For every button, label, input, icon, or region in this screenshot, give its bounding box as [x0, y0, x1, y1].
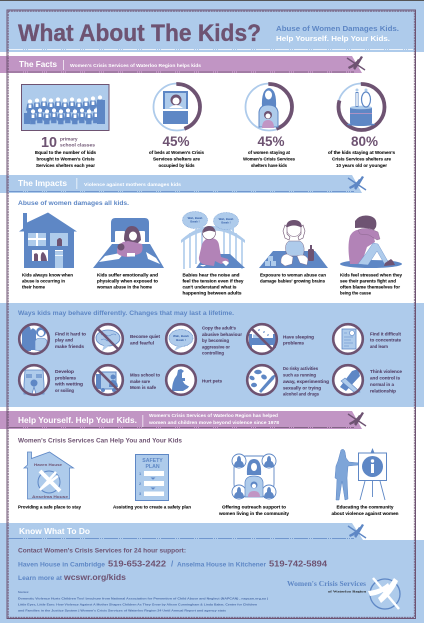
label: find it difficult: and learn: [370, 344, 388, 349]
text: kids suffer: Kids suffer emotionally and: [97, 272, 158, 278]
label: copy the adult's: [202, 326, 242, 356]
label: become quiet: [130, 334, 160, 346]
subtitle: Help Yourself. Help Your Kids.: [276, 34, 390, 43]
stat: 10 primary school classes: primary: [60, 136, 78, 142]
heading: know what to do: Know What To Do: [19, 527, 90, 536]
caption: safety plan: Assisting you to create a safety plan: [113, 505, 191, 510]
label: develop problems: Develop: [55, 369, 74, 374]
label: find it hard: [55, 331, 86, 349]
panel: the facts heading ribbon: [0, 56, 365, 73]
icon: sleeping problems: [247, 324, 277, 354]
icon: baby in crib: Bwah !: [221, 220, 231, 224]
panel: know what to do: [0, 523, 424, 623]
panel: the impacts heading ribbon: Violence against mothers damages kids: [84, 182, 181, 187]
icon: wetting or soiling: [19, 365, 49, 395]
panel: ways kids may behave differently: [0, 303, 424, 407]
icon: dragonfly: [348, 524, 366, 538]
title: What About The Kids?: [18, 20, 261, 47]
phone numbers: [18, 558, 327, 568]
text: 80% of kids: of the kids staying at Women's: [328, 150, 395, 155]
logo: women's crisis services: Women's Crisis Services: [287, 581, 366, 588]
icon: baby in crib: Bwah !: [190, 220, 200, 224]
stat: 10 primary school classes: school classes: [60, 142, 95, 148]
text: 45% of women: shelters have kids: [251, 163, 287, 168]
caption: outreach: women living in the community: [218, 511, 289, 516]
caption: educating: [332, 505, 399, 516]
label: hurt pets: Hurt pets: [202, 378, 222, 383]
text: kids feel stressed: see their parents fight and: [340, 278, 396, 284]
sources: [18, 590, 268, 612]
text: 80% of kids: Crisis Services shelters are: [332, 156, 391, 162]
text: babies hear: happening between adults: [182, 290, 242, 296]
icon: copy abusive behaviour: [166, 324, 196, 354]
text: 45% of women: Women's Crisis Services: [243, 156, 295, 162]
icon: find it hard to play: [19, 324, 49, 354]
label: develop problems: with wetting: [54, 382, 83, 387]
text: 45% of beds: occupied by kids: [158, 163, 195, 168]
phone numbers: Haven House in Cambridge: [18, 562, 105, 568]
label: do risky activities: Do risky activities: [283, 366, 318, 371]
label: miss school: make sure: [130, 379, 150, 384]
text: exposure: damage babies' growing brains: [260, 278, 325, 284]
text: kids feel stressed: being the cause: [340, 290, 371, 296]
text: exposure: [260, 272, 326, 284]
icon: haven house shelter: Anselma House: [32, 494, 69, 499]
panel: the impacts heading ribbon: [0, 175, 366, 193]
icon: miss school: [93, 365, 123, 395]
text: kids always know: [22, 272, 73, 290]
panel: help yourself heading ribbon: Women's Crisis Services of Waterloo Region has helped: [149, 413, 278, 418]
text: kids always know: Kids always know when: [22, 272, 73, 278]
text: kids feel stressed: Kids feel stressed when they: [340, 272, 402, 278]
label: think violence: Think violence: [370, 369, 402, 374]
icon: baby in crib: Wah, Bwah: [219, 217, 234, 221]
text: babies hear: feel the tension even if they: [182, 278, 244, 284]
icon: safety plan: SAFETY: [142, 458, 163, 464]
phone numbers: 519-742-5894: [269, 558, 327, 568]
text: 45% of beds: 45%: [162, 134, 190, 149]
heading: abuse damages all kids: Abuse of women damages all kids.: [18, 200, 129, 207]
icon: copy abusive behaviour: Bwah !: [176, 338, 186, 342]
icon: safety plan: [136, 454, 168, 500]
icon: safety plan: 3: [139, 491, 142, 496]
caption: educating: Educating the community: [336, 505, 394, 510]
panel: help yourself heading ribbon: women and children move beyond violence since 1978: [148, 420, 279, 425]
caption: safe place: Providing a safe place to stay: [18, 505, 81, 510]
caption: educating: about violence against women: [332, 511, 399, 516]
text: babies hear: [182, 272, 244, 296]
icon: safety plan: 1: [139, 471, 142, 476]
label: copy the adult's: Copy the adult's: [202, 326, 236, 330]
label: miss school: Miss school to: [130, 373, 160, 378]
label: find it hard: make friends: [55, 344, 84, 349]
text: 45% of beds: of beds at Women's Crisis: [149, 150, 204, 155]
contact heading: Contact Women's Crisis Services for 24 hour support:: [18, 548, 186, 554]
text: 45% of beds: [149, 134, 204, 168]
icon: difficulty concentrating: [333, 324, 363, 354]
text: 45% of women: of women staying at: [248, 150, 290, 155]
caption: outreach: Offering outreach support to: [222, 505, 286, 510]
subtitle: [276, 24, 399, 43]
phone numbers: /: [171, 560, 174, 568]
text: kids suffer: [96, 272, 158, 290]
icon: haven house shelter: Haven House: [34, 462, 63, 467]
text: 80% of kids: [328, 134, 395, 168]
stat: 10 primary school classes: brought to Women's Crisis: [36, 156, 95, 162]
logo: women's crisis services: of Waterloo Region: [328, 590, 366, 594]
text: 80% of kids: 80%: [351, 134, 378, 149]
chart: 45% of beds: [154, 84, 200, 130]
website: [18, 572, 126, 582]
stat: 10 primary school classes: Equal to the number of kids: [35, 150, 96, 155]
label: do risky activities: [283, 366, 329, 397]
label: develop problems: problems: [55, 375, 76, 380]
label: develop problems: or soiling: [55, 388, 74, 393]
text: kids suffer: physically when exposed to: [97, 278, 158, 284]
heading: crisis services can help: Women's Crisis Services Can Help You and Your Kids: [18, 438, 182, 445]
phone numbers: Anselma House in Kitchener: [177, 562, 266, 568]
panel: help yourself heading ribbon: Help Yourself. Help Your Kids.: [18, 415, 137, 425]
icon: presenter with info board: [335, 448, 386, 500]
label: become quiet: and fearful: [130, 340, 154, 346]
label: sleeping problems: problems: [283, 340, 304, 346]
sources: Domestic Violence Hurts Children Too! brochure from National Association for Prevention of Child Abuse and Neglect (NAPCAN) , napcan.org.au |: [18, 596, 268, 600]
chart: 45% of women: [246, 84, 292, 130]
text: kids always know: abuse is occurring in: [22, 278, 65, 284]
text: kids feel stressed: [340, 272, 402, 296]
stat: 10 primary school classes: 10: [41, 135, 57, 151]
icon: outreach support: [232, 454, 276, 499]
text: 45% of women: 45%: [257, 134, 285, 149]
label: miss school: Mom is safe: [130, 385, 156, 390]
label: think violence: relationship: [370, 389, 396, 394]
label: copy the adult's: aggressive or: [202, 344, 230, 349]
text: kids suffer: woman abuse in the home: [96, 284, 152, 290]
icon: risky activities: [247, 365, 277, 395]
label: become quiet: Become quiet: [130, 334, 160, 339]
label: do risky activities: such as running: [283, 373, 316, 378]
icon: sleeping problems: z: [263, 329, 265, 334]
label: develop problems: [54, 369, 83, 393]
icon: baby in crib: Wah, Bwah: [188, 216, 203, 220]
icon: sleeping problems: z: [267, 332, 269, 337]
panel: the impacts heading ribbon: The Impacts: [18, 178, 67, 188]
icon: safety plan: 2: [139, 481, 142, 486]
label: do risky activities: alcohol and drugs: [283, 392, 319, 397]
logo: women's crisis services: [287, 578, 400, 609]
label: find it hard: Find it hard to: [55, 331, 86, 336]
label: find it difficult: [370, 331, 401, 349]
label: think violence: and control is: [370, 375, 400, 380]
website: Learn more at: [18, 575, 63, 582]
label: think violence: [370, 369, 402, 394]
label: copy the adult's: by becoming: [202, 338, 229, 343]
label: find it hard: play and: [55, 338, 73, 343]
panel: the facts heading ribbon: The Facts: [19, 59, 57, 69]
icon: safety plan: PLAN: [145, 464, 160, 470]
label: miss school: [130, 373, 160, 390]
header band: [0, 0, 424, 52]
icon: baby covering ears: [259, 220, 328, 268]
text: 80% of kids: 10 years old or younger: [336, 163, 387, 168]
panel: help yourself heading ribbon: [0, 411, 366, 429]
icon: hurt pets: [166, 365, 196, 395]
icon: child in bed: [93, 218, 164, 268]
text: exposure: Exposure to woman abuse can: [260, 272, 326, 278]
stat: 10 primary school classes: [35, 135, 96, 168]
subtitle: Abuse of Women Damages Kids.: [276, 24, 399, 33]
icon: stressed child: [340, 216, 402, 268]
text: 45% of beds: Services shelters are: [153, 156, 200, 162]
text: babies hear: can't understand what is: [182, 284, 237, 290]
icon: house: [19, 212, 77, 268]
website: wcswr.org/kids: [63, 572, 126, 582]
label: copy the adult's: abusive behaviour: [202, 332, 242, 337]
text: kids always know: their home: [22, 284, 45, 290]
phone numbers: 519-653-2422: [108, 558, 166, 568]
label: think violence: normal in a: [370, 382, 394, 387]
label: find it difficult: to concentrate: [370, 338, 401, 343]
sources: Little Eyes, Little Ears: How Violence Against A Mother Shapes Children As They Grow by Alison Cunningham & Linda Baker, Centre for Children: [18, 602, 257, 606]
text: kids feel stressed: often blame themselves for: [340, 284, 400, 290]
icon: copy abusive behaviour: Wah, Bwah: [173, 334, 189, 338]
sources: Sources:: [18, 590, 29, 594]
label: find it difficult: Find it difficult: [370, 331, 401, 336]
icon: become quiet: [93, 324, 123, 354]
label: copy the adult's: controlling: [202, 351, 224, 356]
icon: violence and control: [333, 365, 363, 395]
text: babies hear: Babies hear the noise and: [182, 272, 240, 278]
panel: the facts heading ribbon: Women's Crisis Services of Waterloo Region helps kids: [70, 63, 201, 68]
icon: haven house shelter: [24, 452, 74, 499]
label: sleeping problems: [283, 334, 314, 346]
label: do risky activities: sexually or trying: [283, 385, 321, 390]
icon: crowd of children: [22, 84, 109, 130]
caption: outreach: [218, 505, 289, 516]
sources: and Families in the Justice System | Women's Crisis Services of Waterloo Region 24 Until Annual Report and agency stats: [18, 608, 227, 612]
stat: 10 primary school classes: Services shelters each year: [36, 163, 95, 168]
label: do risky activities: away, experimenting: [283, 379, 329, 384]
icon: sleeping problems: z: [258, 327, 260, 332]
text: 45% of women: [243, 134, 295, 168]
chart: 80% of kids: [338, 84, 385, 130]
label: sleeping problems: Have sleeping: [283, 334, 314, 339]
icon: baby in crib: [181, 212, 245, 269]
heading: ways kids behave: Ways kids may behave differently. Changes that may last a lifetime.: [18, 310, 234, 317]
